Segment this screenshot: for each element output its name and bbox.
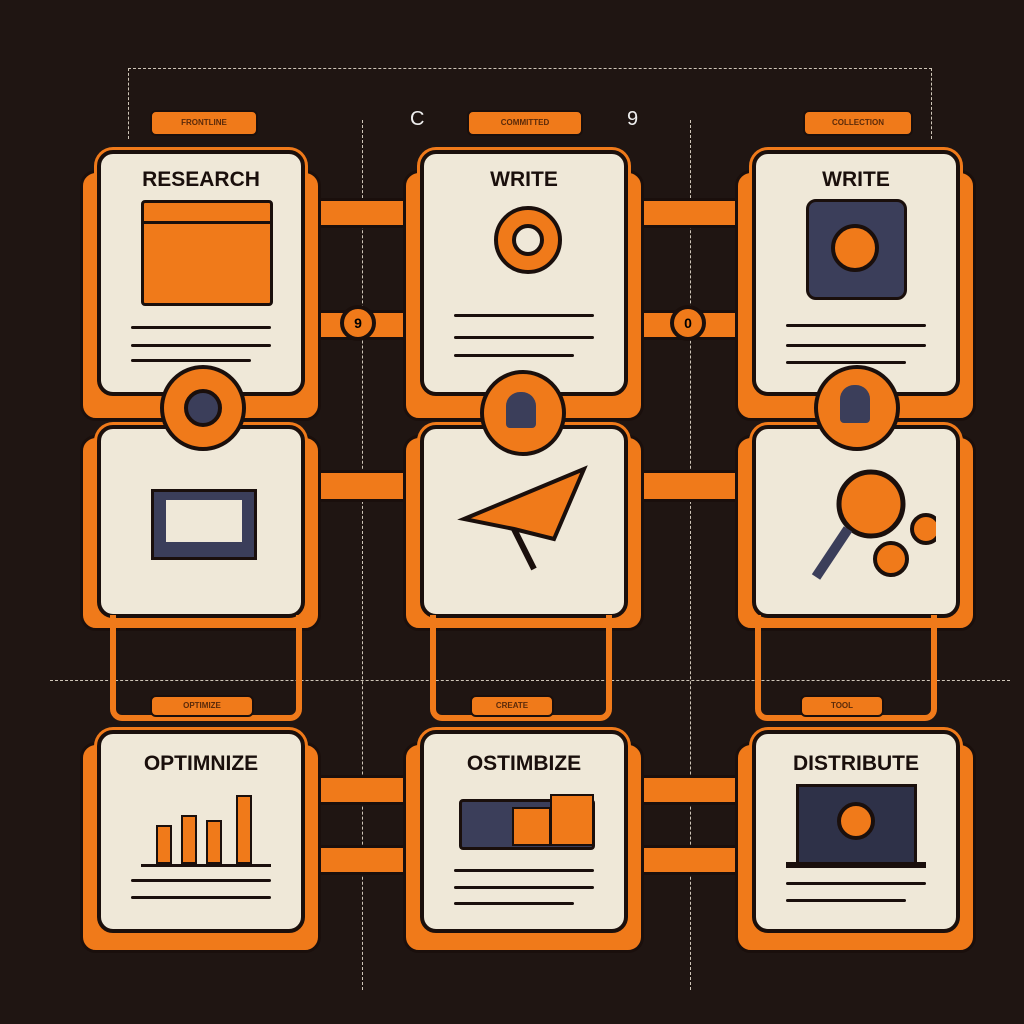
panel: write 1: WRITE — [490, 168, 558, 191]
panel: email — [83, 422, 321, 628]
top labels — [152, 108, 911, 134]
panel: ostimbize — [403, 727, 644, 950]
panel: rocket — [403, 422, 644, 628]
top labels: FRONTLINE — [181, 118, 227, 127]
row 2 bottom tabs: TOOL — [831, 701, 853, 710]
panel: distribute — [735, 727, 973, 950]
panel: optimize — [83, 727, 321, 950]
heading: RESEARCH — [142, 168, 260, 191]
top labels: COLLECTION — [832, 118, 884, 127]
icon: envelope — [151, 489, 257, 560]
icon: hex gear — [806, 199, 907, 300]
top labels: C — [410, 108, 424, 130]
panel: write 2: WRITE — [822, 168, 890, 191]
panel: research — [83, 147, 321, 418]
icon: gear — [494, 206, 562, 274]
icon: folders — [459, 799, 595, 850]
top labels: 9 — [627, 108, 638, 130]
panel: search — [735, 422, 973, 628]
connectors: 0 — [684, 315, 692, 331]
icon: laptop — [796, 784, 917, 865]
circle icons between rows — [160, 365, 900, 456]
panel: ostimbize: OSTIMBIZE — [467, 752, 581, 775]
panel: write 2 — [735, 147, 973, 418]
row 2 bottom tabs: CREATE — [496, 701, 528, 710]
connectors: 9 — [354, 315, 362, 331]
panel: write 1 — [403, 147, 644, 418]
top labels: COMMITTED — [501, 118, 549, 127]
panel: distribute: DISTRIBUTE — [793, 752, 919, 775]
icon: browser — [141, 200, 273, 306]
panel: optimize: OPTIMNIZE — [144, 752, 258, 775]
chart: bars — [141, 789, 271, 867]
row 2 bottom tabs — [110, 615, 937, 721]
row 2 bottom tabs: OPTIMIZE — [183, 701, 221, 710]
icon: plane — [457, 465, 588, 570]
icon: magnifier — [812, 470, 936, 580]
